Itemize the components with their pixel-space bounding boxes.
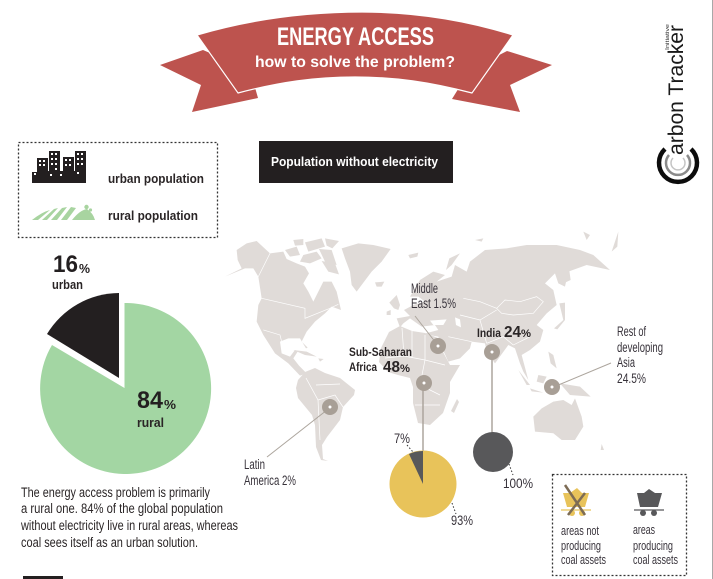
title banner: how to solve the problem? — [255, 54, 455, 71]
logo: Carbon Tracker Initiative: arbon Tracker — [665, 25, 688, 155]
label: Rest of developing Asia: 24.5% — [617, 371, 646, 386]
label: Rest of developing Asia: developing — [617, 340, 663, 355]
label: 93%: 93% — [451, 513, 473, 528]
label: 16% urban: 16 — [53, 251, 78, 278]
marker: Rest of developing Asia — [544, 379, 560, 395]
label: 16% urban: % — [79, 261, 90, 276]
label: 84% rural — [137, 387, 176, 430]
label: 16% urban: urban — [52, 278, 83, 292]
label: India — [477, 324, 531, 341]
body text: without electricity live in rural areas, whereas — [20, 518, 238, 533]
icon: yellow coal cart crossed out — [561, 485, 591, 516]
label: Rest of developing Asia — [617, 324, 663, 386]
label: areas not producing coal assets — [561, 524, 606, 567]
marker: Middle East — [430, 338, 446, 354]
urban population label: urban population — [108, 172, 204, 186]
pie chart: urban vs rural — [40, 251, 211, 474]
label: Middle East: Middle — [411, 281, 438, 296]
title banner: ENERGY ACCESS — [277, 23, 434, 51]
Asia-Pacific islands and Australia — [518, 232, 618, 450]
connector lines — [267, 316, 611, 457]
label: Middle East — [411, 281, 456, 311]
marker: Latin America — [322, 399, 338, 415]
Africa — [379, 326, 460, 425]
label: Sub-Saharan Africa: Sub-Saharan — [349, 345, 412, 359]
icon: dark coal cart — [634, 489, 664, 516]
label: India: India — [477, 326, 501, 340]
label: Latin America — [244, 457, 296, 488]
logo: Carbon Tracker Initiative: Initiative — [665, 24, 671, 50]
label: Rest of developing Asia: Asia — [617, 355, 635, 370]
marker: Sub-Saharan Africa — [416, 375, 432, 391]
heading: population without electricity: Population without electricity — [271, 155, 438, 169]
label: 84% rural: 84 — [137, 387, 164, 414]
label: Middle East: East 1.5% — [411, 296, 456, 311]
label: 84% rural: % — [164, 397, 176, 412]
label: 84% rural: rural — [137, 416, 164, 430]
heading: population without electricity — [259, 141, 453, 183]
label: Sub-Saharan Africa: 48 — [383, 359, 400, 376]
label: Sub-Saharan Africa: % — [400, 363, 410, 375]
label: Latin America: Latin — [244, 457, 265, 472]
pie chart: Africa coal — [390, 431, 473, 528]
label: 7%: 7% — [394, 431, 410, 446]
legend: coal assets — [552, 474, 686, 576]
title banner — [160, 12, 552, 112]
logo: Carbon Tracker Initiative — [659, 24, 697, 182]
Madagascar — [451, 399, 459, 413]
marker: India — [484, 344, 500, 360]
label: areas not producing coal assets: coal assets — [561, 553, 606, 567]
icon: city — [32, 151, 86, 183]
label: areas producing coal assets: areas — [633, 523, 655, 537]
label: India: % — [521, 328, 531, 340]
label: 16% urban — [52, 251, 90, 292]
label: areas producing coal assets: producing — [633, 539, 673, 553]
Americas north — [225, 238, 391, 376]
legend: population types — [18, 142, 218, 238]
body text: coal sees itself as an urban solution. — [21, 535, 198, 550]
label: areas producing coal assets — [633, 523, 678, 567]
label: India: 24 — [504, 324, 521, 341]
South America — [296, 368, 355, 461]
label: 100%: 100% — [503, 476, 533, 491]
body text — [20, 485, 238, 550]
rural population label: rural population — [108, 209, 198, 223]
Eurasia — [387, 238, 610, 380]
icon: rural fields — [32, 205, 95, 220]
label: Rest of developing Asia: Rest of — [617, 324, 646, 339]
label: Sub-Saharan Africa: Africa — [349, 360, 377, 374]
label: Sub-Saharan Africa — [349, 345, 412, 376]
label: Latin America: America 2% — [244, 473, 296, 488]
world map — [225, 232, 618, 461]
body text: The energy access problem is primarily — [21, 485, 210, 500]
label: areas not producing coal assets: producing — [561, 539, 601, 553]
pie chart: India coal — [473, 432, 533, 491]
body text: a rural one. 84% of the global population — [21, 501, 223, 516]
label: areas producing coal assets: coal assets — [633, 553, 678, 567]
label: areas not producing coal assets: areas not — [561, 524, 599, 538]
